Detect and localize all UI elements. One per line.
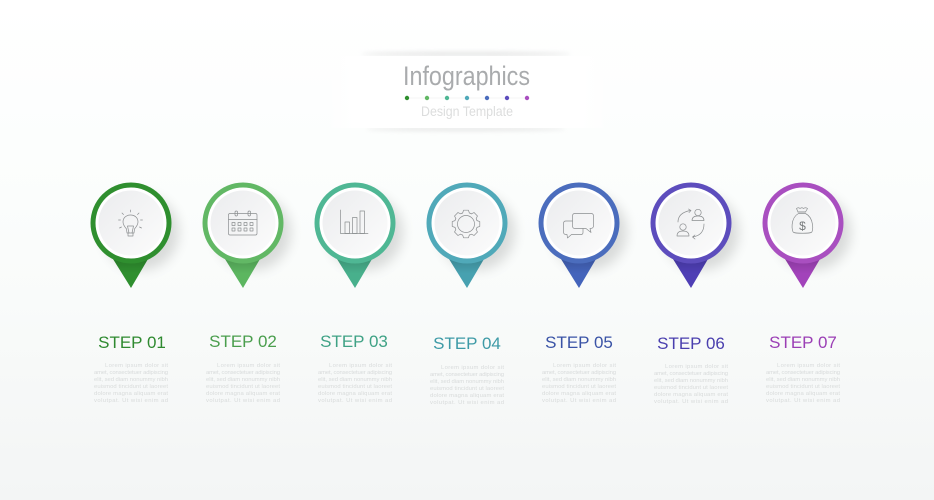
icon: calendar [228, 211, 257, 235]
step 3 text: volutpat. Ut wisi enim ad [318, 398, 392, 404]
step 2 text [206, 363, 280, 404]
step 5 label: STEP 05 [545, 333, 613, 352]
step 2 text: euismod tincidunt ut laoreet [206, 384, 280, 390]
step 3 text [318, 363, 392, 404]
step 5 text: euismod tincidunt ut laoreet [542, 384, 616, 390]
step 3 text: dolore magna aliquam erat [318, 391, 392, 397]
step 7 label: STEP 07 [769, 333, 837, 352]
step 1 text: dolore magna aliquam erat [94, 391, 168, 397]
step 1 pin [90, 182, 179, 288]
step 1 text [94, 363, 168, 404]
step 4 pin [426, 182, 515, 288]
step 1 text: euismod tincidunt ut laoreet [94, 384, 168, 390]
step 1 text: elit, sed diam nonummy nibh [94, 377, 168, 383]
step 6 text: elit, sed diam nonummy nibh [654, 378, 728, 384]
step 2 text: volutpat. Ut wisi enim ad [206, 398, 280, 404]
step 7 text: dolore magna aliquam erat [766, 391, 840, 397]
step 6 text [654, 364, 728, 405]
step 3 label: STEP 03 [320, 332, 388, 351]
step 6 text: Lorem ipsum dolor sit [665, 364, 728, 370]
step 5 text: volutpat. Ut wisi enim ad [542, 398, 616, 404]
step 4 text [430, 365, 504, 406]
step 2 text: amet, consectetuer adipiscing [206, 370, 280, 376]
step 1 text: volutpat. Ut wisi enim ad [94, 398, 168, 404]
step 1 text: amet, consectetuer adipiscing [94, 370, 168, 376]
step 1 label: STEP 01 [98, 333, 166, 352]
title: Infographics [403, 61, 530, 91]
icon: speech bubbles [564, 214, 594, 238]
step 7 text: volutpat. Ut wisi enim ad [766, 398, 840, 404]
step 5 text [542, 363, 616, 404]
step 2 label: STEP 02 [209, 332, 277, 351]
step 6 text: amet, consectetuer adipiscing [654, 371, 728, 377]
step 4 text: euismod tincidunt ut laoreet [430, 386, 504, 392]
step 3 pin [314, 182, 403, 288]
icon: gear [452, 210, 480, 238]
step 4 text: dolore magna aliquam erat [430, 393, 504, 399]
step 6 text: dolore magna aliquam erat [654, 392, 728, 398]
step 7 text: elit, sed diam nonummy nibh [766, 377, 840, 383]
step 4 text: elit, sed diam nonummy nibh [430, 379, 504, 385]
step 5 text: amet, consectetuer adipiscing [542, 370, 616, 376]
step 6 text: volutpat. Ut wisi enim ad [654, 399, 728, 405]
step 3 text: elit, sed diam nonummy nibh [318, 377, 392, 383]
step 3 text: euismod tincidunt ut laoreet [318, 384, 392, 390]
step 6 pin [650, 182, 739, 288]
step 5 text: elit, sed diam nonummy nibh [542, 377, 616, 383]
step 2 text: dolore magna aliquam erat [206, 391, 280, 397]
step 1 text: Lorem ipsum dolor sit [105, 363, 168, 369]
step 4 text: amet, consectetuer adipiscing [430, 372, 504, 378]
step 6 text: euismod tincidunt ut laoreet [654, 385, 728, 391]
step 2 pin [202, 182, 291, 288]
icon: money bag [792, 208, 813, 233]
step 7 pin [762, 182, 851, 288]
step 7 text: amet, consectetuer adipiscing [766, 370, 840, 376]
step 4 text: volutpat. Ut wisi enim ad [430, 400, 504, 406]
icon: people cycle [677, 209, 704, 239]
subtitle: Design Template [421, 103, 513, 119]
step 7 text: euismod tincidunt ut laoreet [766, 384, 840, 390]
step 5 pin [538, 182, 627, 288]
icon: dollar sign: $ [799, 219, 806, 233]
step 7 text: Lorem ipsum dolor sit [777, 363, 840, 369]
step 7 text [766, 363, 840, 404]
icon: bar chart [340, 210, 368, 234]
step 4 label: STEP 04 [433, 334, 501, 353]
step 6 label: STEP 06 [657, 334, 725, 353]
dotted colour row [405, 96, 529, 100]
step 3 text: amet, consectetuer adipiscing [318, 370, 392, 376]
step 5 text: dolore magna aliquam erat [542, 391, 616, 397]
icon: light bulb [118, 210, 142, 236]
step 2 text: elit, sed diam nonummy nibh [206, 377, 280, 383]
step 2 text: Lorem ipsum dolor sit [217, 363, 280, 369]
banner [325, 52, 610, 131]
step 4 text: Lorem ipsum dolor sit [441, 365, 504, 371]
step 5 text: Lorem ipsum dolor sit [553, 363, 616, 369]
step 3 text: Lorem ipsum dolor sit [329, 363, 392, 369]
